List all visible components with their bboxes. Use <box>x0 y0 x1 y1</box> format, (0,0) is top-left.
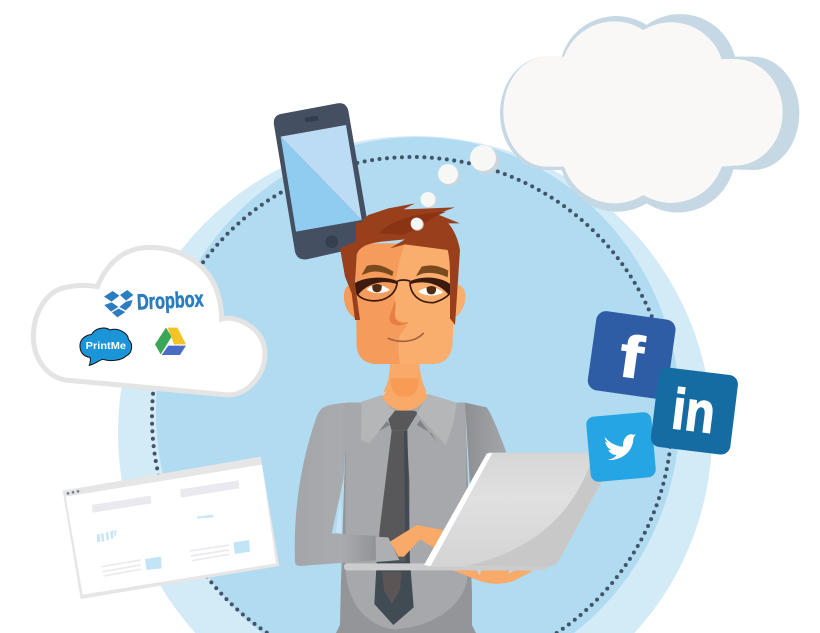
facial details <box>340 203 460 325</box>
glasses <box>352 278 454 303</box>
eyes <box>367 284 443 296</box>
left sleeve <box>295 403 380 566</box>
hair <box>340 203 460 325</box>
ears <box>344 285 360 318</box>
person body <box>295 377 602 633</box>
icon: linkedin: in <box>669 377 719 446</box>
mouth <box>388 333 423 341</box>
text lines <box>102 545 229 576</box>
thought cloud <box>500 14 799 213</box>
supporting hand <box>452 570 533 584</box>
collar shadow <box>369 421 390 443</box>
torso <box>336 403 476 633</box>
blue boxes <box>145 540 250 570</box>
laptop <box>344 453 602 570</box>
header bars <box>92 480 239 513</box>
cuff <box>376 537 399 562</box>
typing hand <box>390 525 443 557</box>
dashboard window <box>63 457 279 599</box>
face <box>355 243 457 364</box>
logos <box>104 286 205 355</box>
logo: printme <box>80 328 132 365</box>
icon: linkedin <box>650 366 739 456</box>
thought bubbles <box>420 145 500 208</box>
dotted orbit ring <box>152 157 672 633</box>
tie <box>377 431 409 563</box>
storage cloud <box>33 247 265 395</box>
icon: facebook: f <box>615 322 648 392</box>
logo: printme: PrintMe <box>86 341 126 352</box>
logo: dropbox: Dropbox <box>136 286 205 315</box>
collar <box>361 395 395 443</box>
nose <box>389 299 409 325</box>
neck base <box>382 377 428 411</box>
background circle: inner <box>156 137 680 633</box>
person head <box>340 203 466 392</box>
mini charts <box>97 515 213 543</box>
right shoulder <box>465 403 507 487</box>
eyebrows <box>362 265 448 277</box>
background circle: outer <box>118 136 712 633</box>
neck <box>383 362 427 392</box>
logo: google drive <box>155 328 186 355</box>
window dots <box>67 490 79 495</box>
icon: facebook <box>586 310 677 400</box>
forehead bubble <box>411 218 424 231</box>
phone <box>274 103 370 260</box>
social icons <box>586 310 739 482</box>
icon: twitter <box>586 412 656 482</box>
